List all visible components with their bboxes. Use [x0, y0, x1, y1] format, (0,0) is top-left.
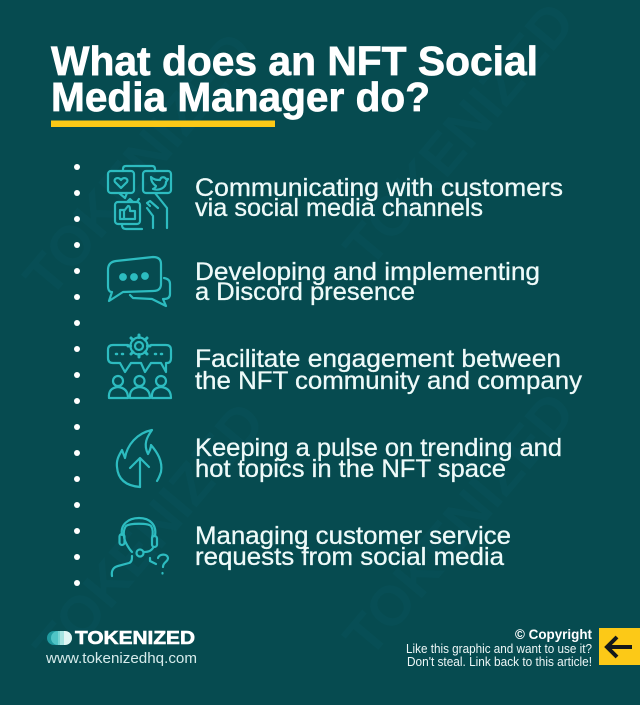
website url: www.tokenizedhq.com: [45, 650, 197, 667]
logo wordmark: TOKENIZED: [75, 627, 195, 648]
item text: trending topics: hot topics in the NFT space: [195, 455, 506, 483]
copyright notice: © Copyright: [515, 626, 592, 642]
logo: [47, 627, 195, 648]
item text: trending topics: Keeping a pulse on trending and: [195, 434, 562, 462]
title: What does an NFT Social: [51, 38, 538, 84]
title underline: [51, 120, 275, 127]
icon: social media: [108, 166, 171, 229]
item text: engagement: Facilitate engagement between: [195, 345, 561, 373]
item text: discord: [195, 258, 540, 306]
item text: engagement: the NFT community and company: [195, 367, 583, 395]
item text: trending topics: [195, 434, 562, 483]
copyright notice: Like this graphic and want to use it?: [406, 642, 592, 656]
item text: social media channels: Communicating with customers: [195, 174, 563, 202]
copyright notice: [406, 626, 592, 669]
item text: customer service: Managing customer service: [195, 522, 511, 550]
item text: engagement: [195, 345, 583, 395]
item text: social media channels: via social media channels: [195, 194, 483, 222]
icon: chat bubbles: [108, 257, 170, 306]
background: TOKENIZED: [21, 390, 277, 678]
background: TOKENIZED: [331, 380, 587, 668]
dotted timeline: [74, 164, 80, 586]
item text: discord: Developing and implementing: [195, 258, 540, 286]
title: Media Manager do?: [51, 74, 430, 120]
logo mark: [47, 631, 72, 645]
icon: left arrow: [607, 637, 632, 657]
item text: customer service: [195, 522, 511, 571]
icon: community gear: [108, 335, 171, 398]
item text: social media channels: [195, 174, 563, 222]
background: TOKENIZED: [11, 20, 267, 308]
icon: customer support: [112, 518, 168, 576]
item text: customer service: requests from social media: [195, 543, 504, 571]
item text: discord: a Discord presence: [195, 278, 415, 306]
yellow arrow box: [599, 628, 640, 665]
copyright notice: Don't steal. Link back to this article!: [407, 655, 592, 669]
icon: trending flame: [117, 430, 161, 487]
title: [51, 38, 538, 120]
